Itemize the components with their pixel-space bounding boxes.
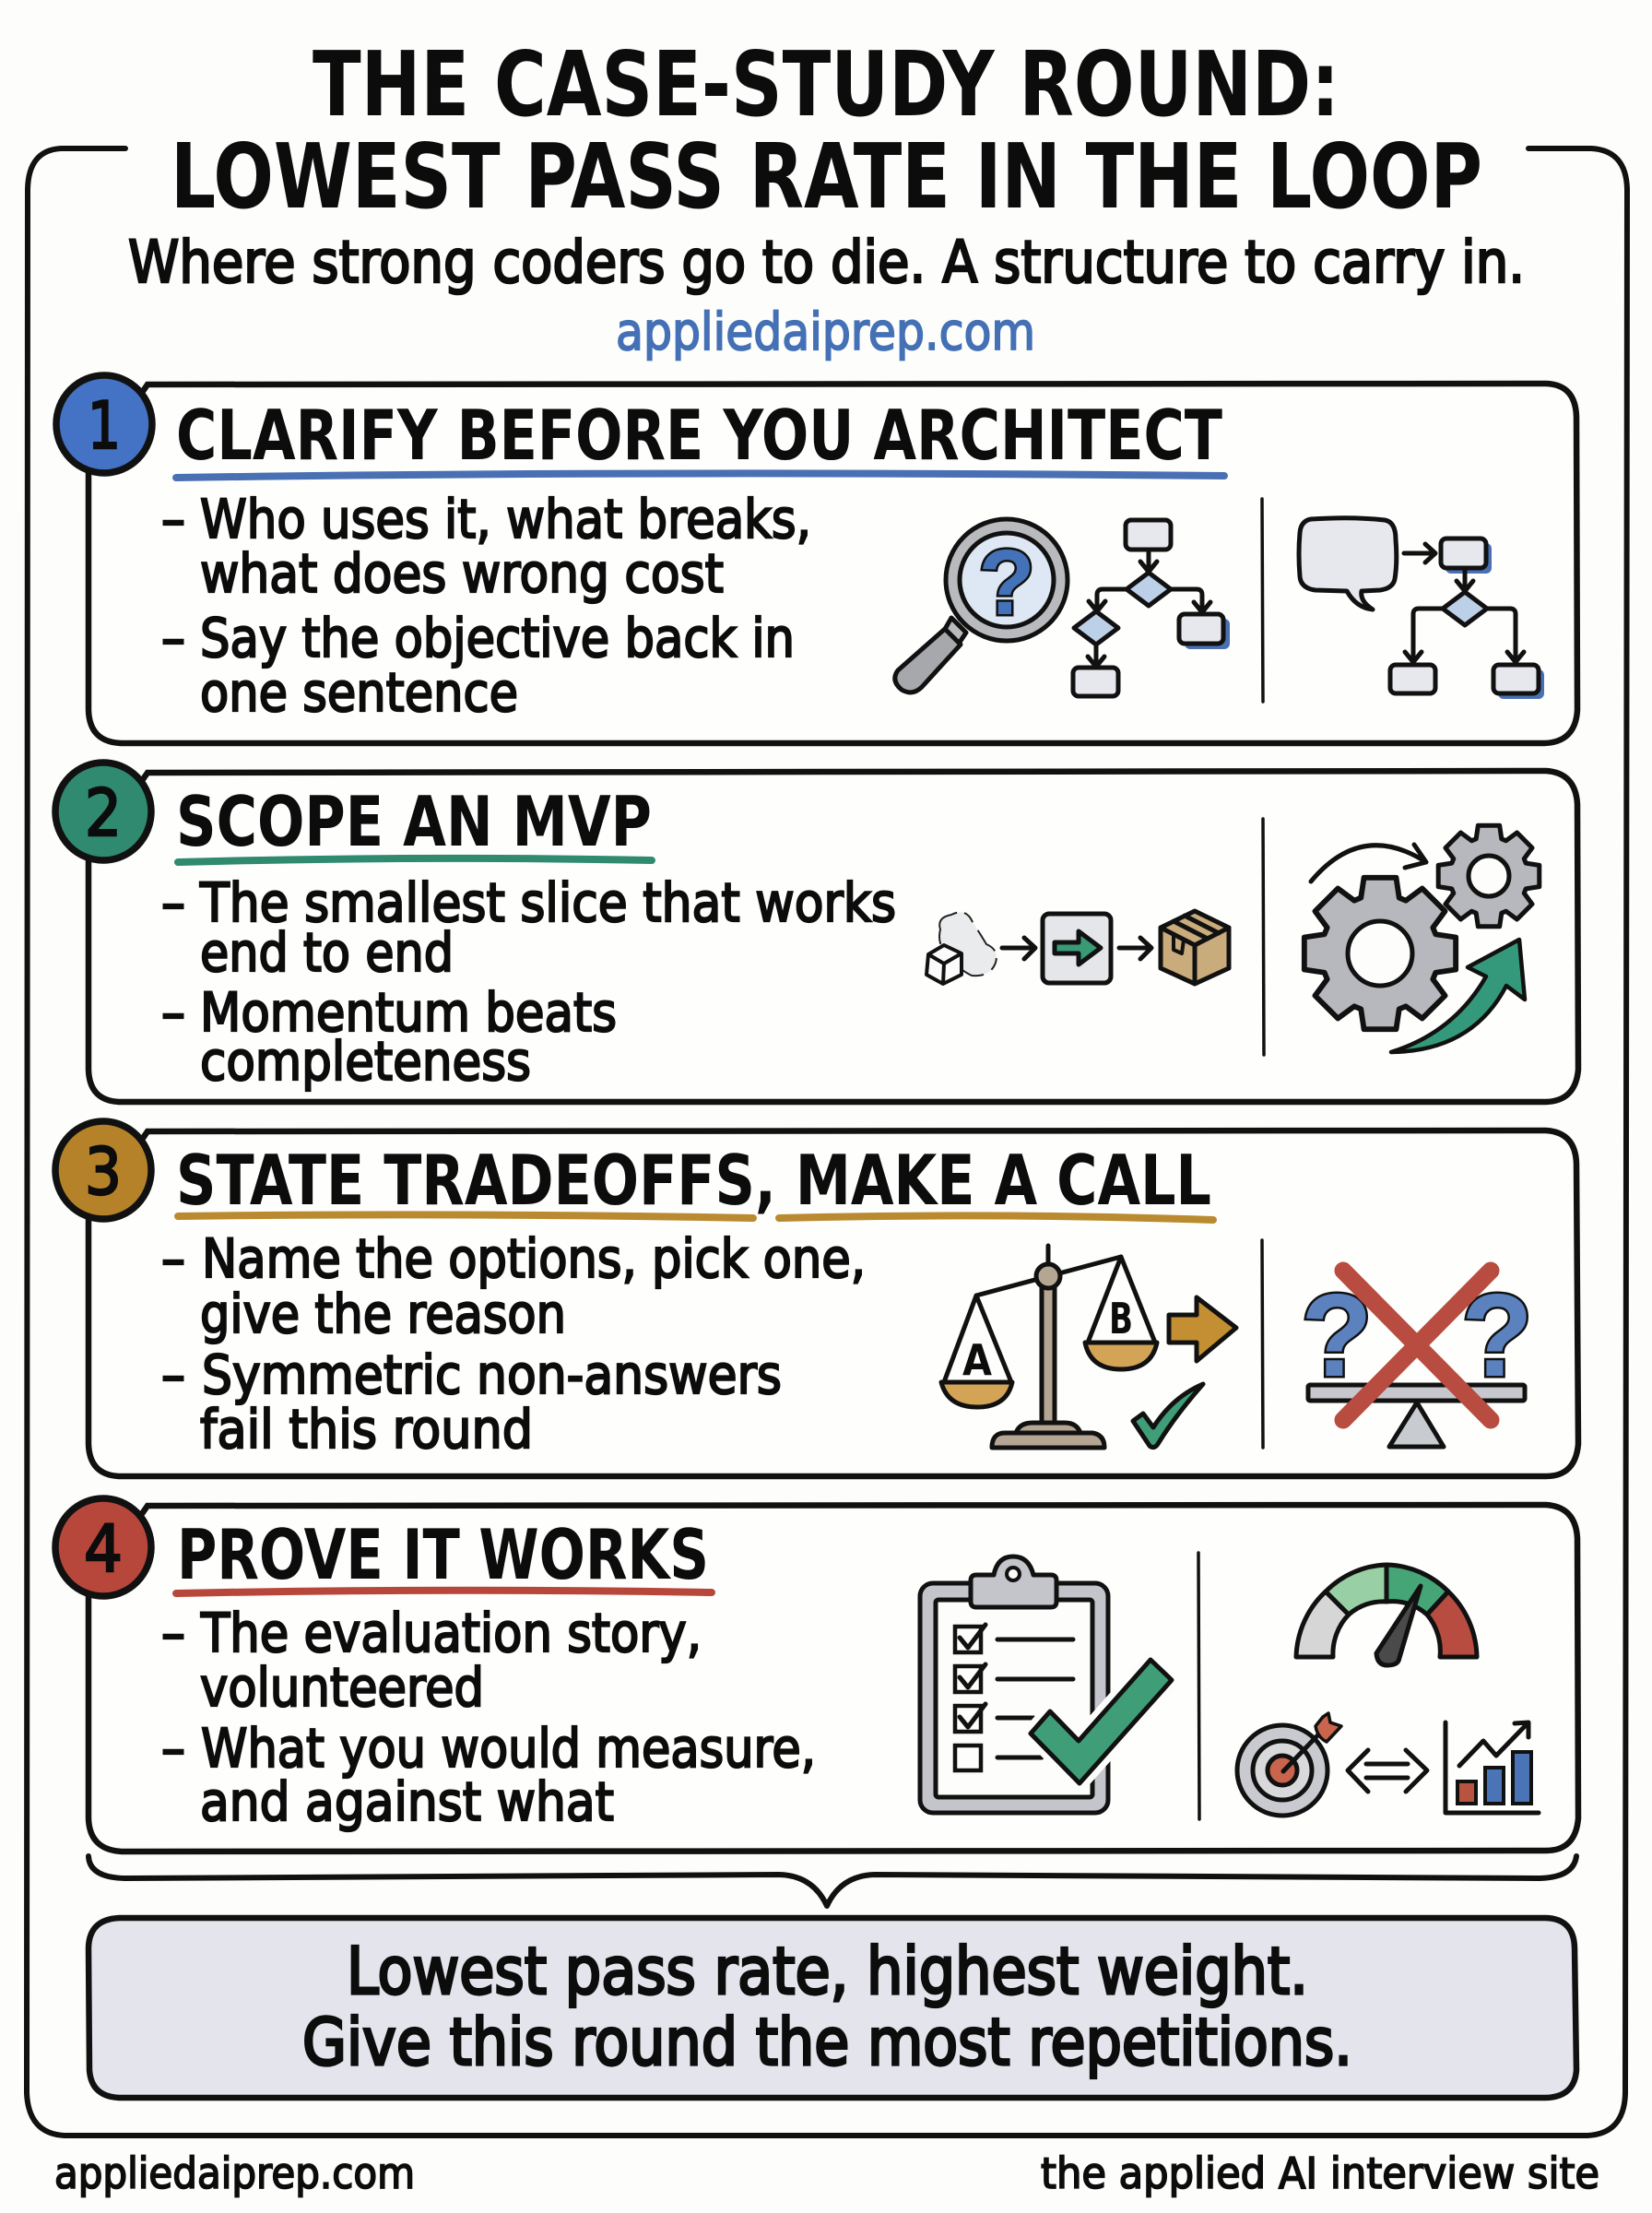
underline 1 bbox=[176, 473, 1224, 478]
divider 4 bbox=[1198, 1553, 1199, 1819]
callout text: Lowest pass rate, highest weight. bbox=[347, 1934, 1308, 2009]
divider 1 bbox=[1262, 499, 1263, 702]
bullets 4: What you would measure, bbox=[201, 1717, 816, 1780]
badge 2: 2 bbox=[85, 775, 122, 851]
bullets 2: – bbox=[161, 871, 185, 934]
bullets 2: completeness bbox=[200, 1030, 531, 1093]
underline 4 bbox=[176, 1591, 712, 1593]
badge 3 bbox=[55, 1121, 151, 1219]
bullets 2: Momentum beats bbox=[200, 981, 617, 1044]
bullets 4: volunteered bbox=[200, 1656, 484, 1719]
bullets 3: give the reason bbox=[200, 1283, 566, 1345]
icon: double arrow bbox=[1348, 1750, 1427, 1792]
badge 1 bbox=[56, 375, 152, 473]
icon: speech bubble and flowchart bbox=[1299, 518, 1544, 699]
bullets 3: – bbox=[161, 1343, 185, 1406]
bullets 1: – bbox=[161, 607, 185, 669]
footer left: appliedaiprep.com bbox=[54, 2148, 415, 2198]
icon: flowchart left bbox=[1073, 520, 1230, 696]
icon: scope flow bbox=[926, 911, 1229, 984]
icon: gold arrow bbox=[1169, 1297, 1236, 1361]
bullets 1: one sentence bbox=[200, 661, 518, 724]
bullets 4: – bbox=[161, 1717, 185, 1780]
callout text: Give this round the most repetitions. bbox=[302, 2005, 1352, 2080]
bullets 3 bbox=[161, 1227, 866, 1461]
bullets 1: Who uses it, what breaks, bbox=[200, 488, 811, 550]
bullets 3: – bbox=[161, 1227, 185, 1290]
bullets 2 bbox=[161, 871, 896, 1093]
icon: scale: A bbox=[962, 1335, 992, 1385]
underline 3 bbox=[178, 1214, 1213, 1220]
icon: crossed-out balance: ? bbox=[1301, 1270, 1373, 1401]
panel 1: clarify bbox=[56, 375, 1577, 743]
icon: gauge bbox=[1296, 1565, 1477, 1665]
callout text bbox=[302, 1934, 1352, 2080]
brace bbox=[88, 1856, 1576, 1906]
bullets 3: fail this round bbox=[200, 1398, 533, 1461]
icon: gears and growth arrow bbox=[1304, 825, 1540, 1052]
panel 3: tradeoffs bbox=[55, 1121, 1578, 1476]
title bbox=[171, 32, 1482, 229]
divider 3 bbox=[1262, 1240, 1263, 1448]
icon: scale: B bbox=[1109, 1294, 1133, 1343]
icon: bar chart bbox=[1446, 1722, 1539, 1813]
divider 2 bbox=[1263, 819, 1264, 1055]
badge 4 bbox=[55, 1498, 151, 1596]
bullets 4: The evaluation story, bbox=[200, 1602, 702, 1664]
icon: crossed-out balance bbox=[1301, 1270, 1533, 1447]
bullets 1: Say the objective back in bbox=[200, 607, 795, 669]
icon: magnifier bbox=[895, 519, 1068, 692]
icon: green check bbox=[1133, 1384, 1203, 1448]
bullets 3: Symmetric non-answers bbox=[202, 1343, 782, 1406]
icon: target bbox=[1237, 1713, 1341, 1816]
icon: clipboard bbox=[920, 1556, 1172, 1813]
badge 4: 4 bbox=[84, 1511, 123, 1587]
panel 4: prove bbox=[55, 1498, 1578, 1852]
callout bbox=[88, 1918, 1576, 2098]
bullets 2: – bbox=[161, 981, 185, 1044]
bullets 1: – bbox=[161, 488, 185, 550]
site link: appliedaiprep.com bbox=[616, 302, 1035, 362]
heading 1: CLARIFY BEFORE YOU ARCHITECT bbox=[176, 395, 1222, 476]
underline 2 bbox=[178, 858, 652, 862]
bullets 1 bbox=[161, 488, 811, 724]
bullets 2: The smallest slice that works bbox=[199, 871, 896, 934]
badge 3: 3 bbox=[85, 1134, 122, 1210]
bullets 1: what does wrong cost bbox=[200, 542, 724, 605]
footer right: the applied AI interview site bbox=[1041, 2148, 1599, 2198]
bullets 4: – bbox=[161, 1602, 185, 1664]
heading 3: STATE TRADEOFFS, MAKE A CALL bbox=[176, 1140, 1211, 1221]
heading 4: PROVE IT WORKS bbox=[177, 1514, 709, 1595]
panel 2: scope bbox=[55, 763, 1578, 1102]
icon: crossed-out balance: ? bbox=[1461, 1270, 1533, 1401]
badge 1: 1 bbox=[88, 388, 121, 464]
bullets 4: and against what bbox=[200, 1770, 614, 1833]
title: THE CASE-STUDY ROUND: bbox=[313, 32, 1339, 136]
bullets 4 bbox=[161, 1602, 816, 1833]
icon: scale bbox=[941, 1246, 1157, 1448]
bullets 3: Name the options, pick one, bbox=[202, 1227, 866, 1290]
heading 2: SCOPE AN MVP bbox=[176, 781, 652, 862]
bullets 2: end to end bbox=[200, 921, 454, 984]
icon: magnifier: ? bbox=[978, 531, 1035, 634]
badge 2 bbox=[55, 763, 151, 860]
